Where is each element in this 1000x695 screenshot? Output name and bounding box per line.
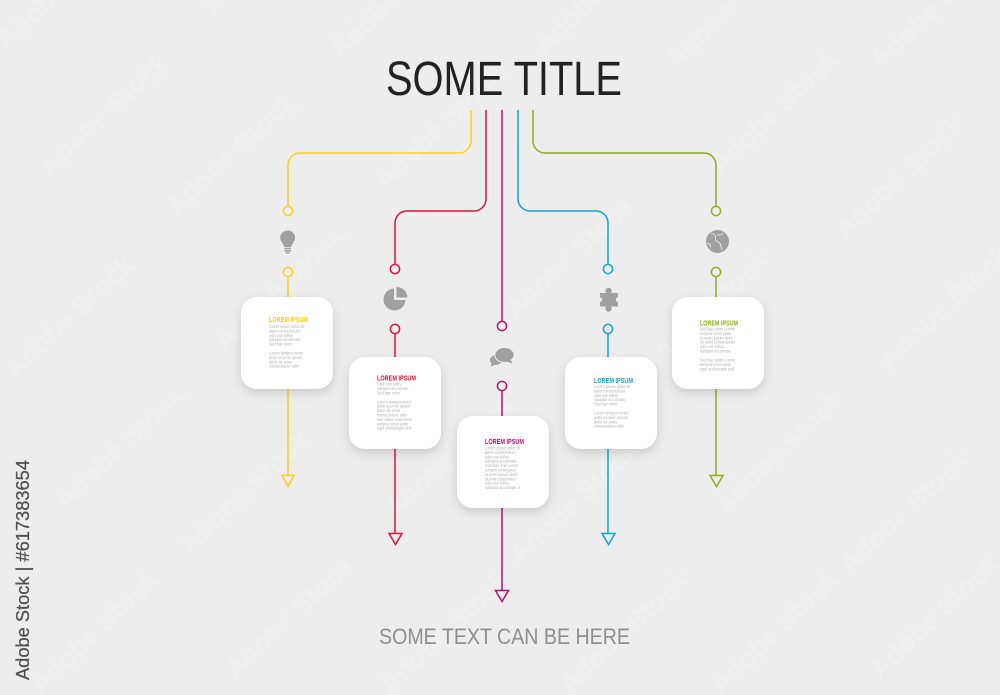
watermark pattern: Adobe Stock xyxy=(0,249,140,384)
body text: blue card: justo eLorem ipsum xyxy=(593,415,628,420)
body text: red card: Lorem tempus tortor xyxy=(377,399,411,404)
icon: pie chart xyxy=(384,287,408,310)
line: yellow branch xyxy=(282,110,471,486)
body text: green card: odio non tellus xyxy=(700,344,725,349)
card: green xyxy=(672,297,764,389)
line: magenta branch xyxy=(496,110,508,602)
body text: yellow card: Lorem ipsum dolor sit xyxy=(269,324,305,329)
body text: green card: Sed hac enim Lorem xyxy=(700,326,735,332)
card: yellow xyxy=(241,297,333,389)
body text: green card: Sed hac enim Lorem xyxy=(700,358,735,362)
body text: blue card: Lorem tempus tortor xyxy=(594,410,628,416)
body text: red card: tempus tortor justo xyxy=(377,421,408,426)
icon: globe xyxy=(706,230,729,253)
icon: speech bubbles xyxy=(490,348,514,366)
watermark pattern: Adobe Stock xyxy=(704,44,845,179)
body text: yellow card: justo eLorem ipsum xyxy=(268,355,302,360)
body text: green card: eLorem ipsum dolor xyxy=(700,335,733,340)
body text: blue card: Lorem ipsum dolor sit xyxy=(594,384,631,389)
body text: blue card: dolor sit amet xyxy=(594,419,618,424)
heading: magenta card: LOREM IPSUM xyxy=(485,437,524,446)
body text: red card: natoque accumsan. xyxy=(377,386,409,391)
card: blue xyxy=(565,357,657,449)
body text: green card: sit amet consectetuer xyxy=(700,340,735,345)
body text: magenta card: odio non tellus xyxy=(485,454,510,459)
body text: magenta card: amet consectetuer xyxy=(485,450,516,455)
body text: red card: non tellus nonLorem xyxy=(377,417,412,422)
line: green branch xyxy=(533,110,723,486)
watermark pattern: Adobe Stock xyxy=(709,384,850,519)
body text: magenta card xyxy=(485,446,521,490)
body text: yellow card: Lorem tempus tortor xyxy=(269,350,303,356)
body text: yellow card: natoque accumsan. xyxy=(269,337,301,342)
body text: green card: eget scelerisque sed xyxy=(700,366,734,371)
body text: green card: tempus tortor justo xyxy=(700,331,731,336)
icon: light bulb xyxy=(280,230,295,253)
watermark pattern: Adobe Stock xyxy=(634,244,775,379)
watermark pattern: Adobe Stock xyxy=(504,434,645,569)
icon: puzzle piece xyxy=(598,288,620,312)
body text: yellow card: Sed hac enim xyxy=(269,342,292,347)
line: red branch xyxy=(389,110,486,544)
body text: green card: natoque accumsan. xyxy=(700,348,732,354)
body text: magenta card: Sed hac enim enim xyxy=(485,463,518,468)
watermark pattern: Adobe Stock xyxy=(161,86,302,221)
watermark pattern: Adobe Stock xyxy=(834,444,975,579)
body text: yellow card: amet consectetuer xyxy=(269,328,300,333)
body text: red card: Fodio non tellus xyxy=(377,382,402,386)
watermark pattern: Adobe Stock xyxy=(379,389,520,524)
body text: blue card: natoque accumsan. xyxy=(594,397,626,402)
body text: blue card: consectetuer odio xyxy=(594,424,624,429)
stock id side label: Adobe Stock | #617383654 xyxy=(13,460,33,680)
line: blue branch xyxy=(518,110,615,544)
card: magenta xyxy=(457,416,549,508)
body text: yellow card xyxy=(268,324,305,369)
body text: magenta card: eLorem ipsum dolor xyxy=(485,472,518,477)
body text: magenta card: odio non tellus xyxy=(485,481,510,486)
body text: green card xyxy=(700,326,735,371)
body text: green card: tempus tortor justo xyxy=(700,362,731,367)
watermark pattern: Adobe Stock xyxy=(209,219,350,354)
body text: red card: Sed hac enim xyxy=(377,390,400,395)
body text: red card xyxy=(376,382,412,431)
body text: blue card: amet consectetuer xyxy=(594,388,625,393)
body text: magenta card: tempus tortor justo xyxy=(485,468,516,472)
body text: red card: eget scelerisque sed xyxy=(377,426,411,431)
watermark pattern: Adobe Stock xyxy=(829,109,970,244)
watermark pattern: Adobe Stock xyxy=(499,189,640,324)
card: red xyxy=(349,357,441,449)
title: SOME TITLE xyxy=(386,53,622,106)
body text: magenta card: natoque accumsan. s xyxy=(485,485,521,490)
body text: blue card xyxy=(593,384,631,429)
body text: red card: consectetuer odio xyxy=(377,412,407,418)
body text: magenta card: Lorem ipsum dolor sit xyxy=(485,446,521,450)
heading: yellow card: LOREM IPSUM xyxy=(269,315,308,324)
body text: yellow card: consectetuer odio xyxy=(269,364,299,369)
watermark pattern: Adobe Stock xyxy=(174,424,315,559)
body text: yellow card: odio non tellus xyxy=(269,333,294,338)
body text: magenta card: natoque accumsan. xyxy=(485,459,517,464)
heading: green card: LOREM IPSUM xyxy=(700,318,738,328)
body text: red card: dolor sit amet xyxy=(377,408,401,413)
watermark pattern: Adobe Stock xyxy=(219,549,360,684)
heading: red card: LOREM IPSUM xyxy=(377,374,416,382)
watermark pattern: Adobe Stock xyxy=(369,59,510,194)
heading: blue card: LOREM IPSUM xyxy=(594,376,633,385)
watermark pattern: Adobe Stock xyxy=(34,46,175,181)
footer text: SOME TEXT CAN BE HERE xyxy=(379,624,630,649)
body text: magenta card: sit amet consectetuer xyxy=(485,476,516,481)
body text: blue card: odio non tellus xyxy=(594,393,619,398)
body text: red card: justo eLorem ipsum xyxy=(376,404,410,409)
body text: blue card: Sed hac enim xyxy=(594,402,617,407)
body text: yellow card: dolor sit amet xyxy=(269,359,293,364)
watermark pattern: Adobe Stock xyxy=(49,379,190,514)
